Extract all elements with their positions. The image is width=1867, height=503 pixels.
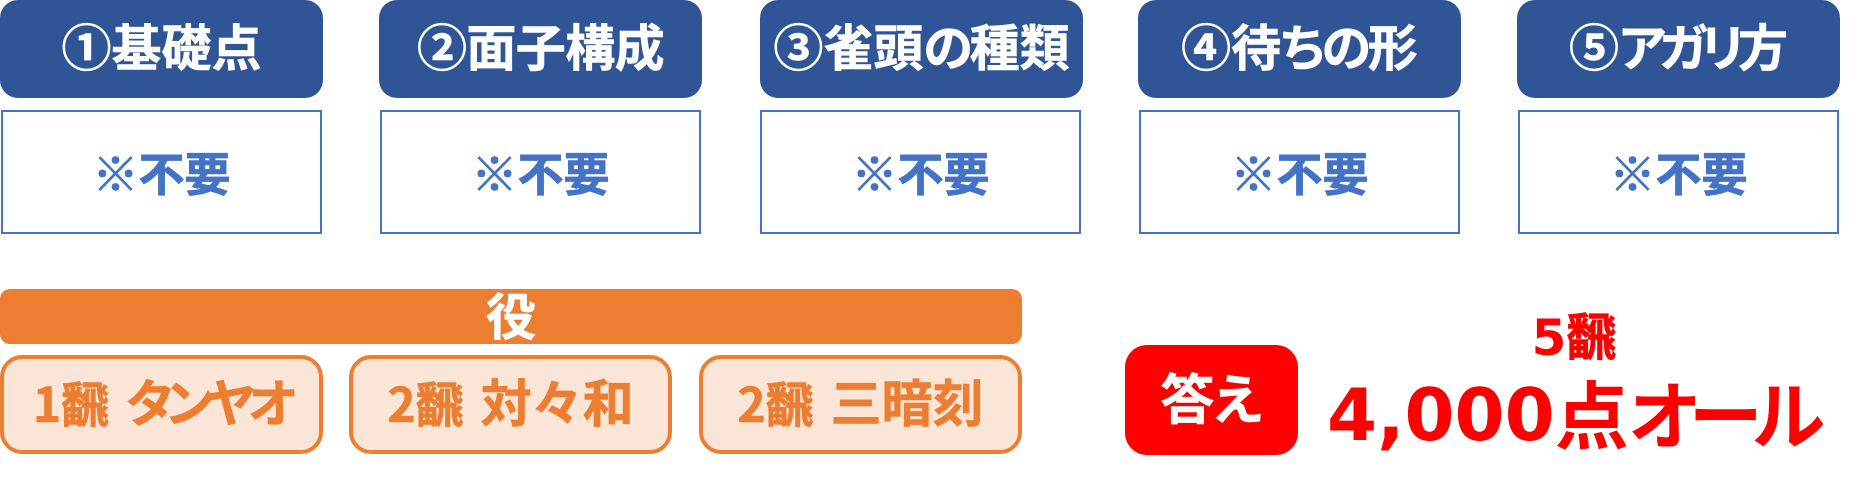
panel: step 5 win method header (1517, 0, 1840, 98)
panel: step 5 value: ※不要 (1610, 139, 1748, 205)
chip: 1 han tanyao (0, 355, 323, 454)
chip: 2 han toitoi: 2飜 対々和 (387, 363, 634, 437)
panel: step 1 base points header (0, 0, 323, 98)
panel: step 5 value (1518, 110, 1839, 234)
panel: step 2 value: ※不要 (472, 139, 610, 205)
callout: answer label: 答え (1160, 356, 1263, 435)
chip: 2 han sanankou: 2飜 三暗刻 (737, 363, 984, 437)
heading: yaku bar (0, 289, 1022, 344)
panel: step 3 value: ※不要 (852, 139, 990, 205)
text: answer 4,000 all: 4,000 (1327, 373, 1555, 457)
text: 5 han: 5飜 (1532, 298, 1616, 370)
heading: yaku bar: 役 (486, 278, 536, 350)
panel: step 3 value (760, 110, 1081, 234)
panel: step 1 value: ※不要 (92, 139, 230, 205)
panel: step 4 value: ※不要 (1230, 139, 1368, 205)
panel: step 1 base points header: ①基礎点 (62, 9, 262, 81)
panel: step 3 pair type header: ③雀頭の種類 (773, 9, 1070, 81)
panel: step 4 wait shape header: ④待ちの形 (1181, 9, 1418, 81)
text: answer 4,000 all (1327, 358, 1824, 465)
panel: step 4 wait shape header (1138, 0, 1461, 98)
panel: step 2 meld composition header (379, 0, 702, 98)
panel: step 3 pair type header (760, 0, 1083, 98)
panel: step 5 win method header: ⑤アガリ方 (1569, 9, 1788, 81)
chip: 2 han toitoi (349, 355, 672, 454)
callout: answer label (1125, 345, 1298, 455)
panel: step 2 value (380, 110, 701, 234)
panel: step 1 value (1, 110, 322, 234)
panel: step 2 meld composition header: ②面子構成 (417, 9, 664, 81)
panel: step 4 value (1139, 110, 1460, 234)
chip: 1 han tanyao: 1飜 タンヤオ (33, 363, 290, 437)
chip: 2 han sanankou (699, 355, 1022, 454)
text: answer 4,000 all: 点オール (1555, 358, 1816, 465)
